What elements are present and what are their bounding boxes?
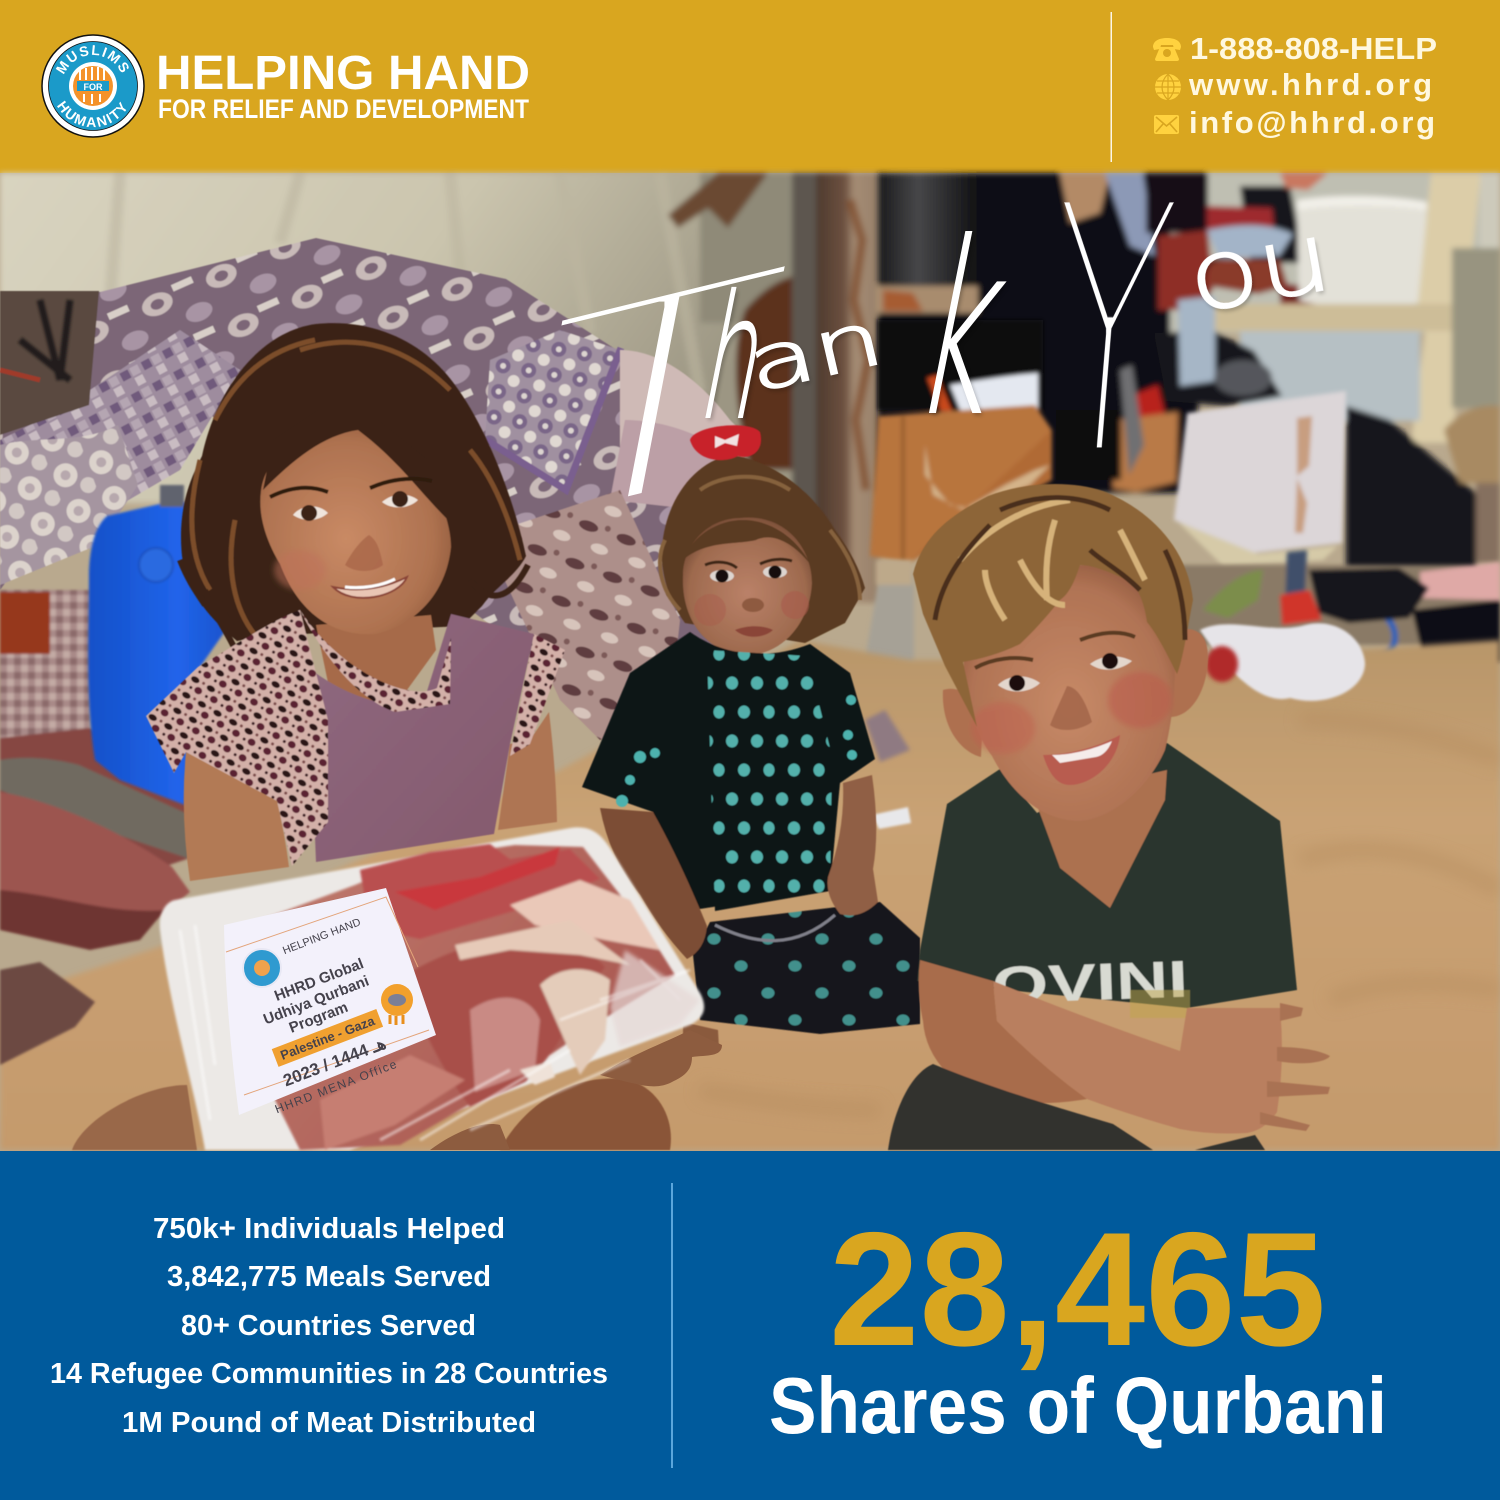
background: dark shelving and clothes [876,173,1500,593]
boy trousers [888,1064,1265,1150]
impact statistics list: 14 Refugee Communities in 28 Countries [50,1358,608,1390]
toddler legs [693,902,920,1034]
impact statistics list: 750k+ Individuals Helped [153,1213,505,1245]
contact details: www.hhrd.org [1188,67,1432,102]
cuts of meat [255,844,675,1150]
impact statistics list [50,1213,608,1439]
label on the package: Program [287,999,350,1037]
handwritten title: Thank You: k [898,192,1028,468]
blanket [0,238,760,777]
boy shirt print: OVINI [991,951,1189,1015]
logo: Muslims for Humanity seal: MUSLIMS [56,45,129,74]
label on the package: HHRD Global [272,955,366,1005]
icon: telephone [1153,38,1181,61]
contact details [1188,31,1437,140]
organisation name: HELPING HAND [156,47,530,100]
sheep sticker [381,984,413,1025]
logo: Muslims for Humanity seal: HUMANITY [57,100,126,128]
boy shirt print [991,951,1190,1018]
boy fingers [1260,1003,1330,1131]
impact statistics list: 3,842,775 Meals Served [167,1261,491,1293]
toddler suit top [582,632,875,910]
girl dress [308,614,534,862]
photo: three children holding a Qurbani meat package [0,132,1500,1151]
child: toddler [582,425,920,1048]
girl legs [500,1078,671,1150]
boy ears [943,629,1208,757]
plastic film highlights [180,925,690,1140]
handwritten title: Thank You: ou [1180,201,1339,334]
logo: Muslims for Humanity seal [41,34,145,138]
organisation name: FOR RELIEF AND DEVELOPMENT [158,94,529,124]
girl arms [184,752,289,881]
left pile of cloth [0,590,190,1065]
background: tent wall [0,173,880,603]
handwritten title: Thank You: h [688,260,783,458]
handwritten title: Thank You: an [739,294,891,410]
toddler scrunchie [690,425,761,460]
header divider [1110,12,1112,162]
girl face [260,422,451,634]
label on the package: 2023 / هـ 1444 [280,1034,389,1090]
header band [0,0,1500,173]
girl hair [181,323,526,641]
girl neck [316,615,436,712]
handwritten title: Thank You: T [498,204,808,596]
label on the package: HELPING HAND [281,916,362,957]
boy neck [1035,770,1167,908]
boy arms [919,960,1087,1103]
boy face [964,565,1175,821]
boy hair [913,484,1193,727]
meat package [160,827,722,1150]
white box [1174,391,1346,566]
contact details: info@hhrd.org [1189,105,1435,140]
boy shirt [917,743,1297,1008]
sand floor [0,623,1500,1150]
organisation name [156,47,530,124]
handwritten title: Thank You: h [688,260,783,458]
handwritten title: Thank You [498,132,1339,596]
child: girl [72,323,671,1150]
toddler face [683,518,812,655]
blue water jug [88,485,288,805]
handwritten title: Thank You: ou [1180,201,1339,334]
hands under tray [600,1030,722,1086]
bottom impact band [0,1151,1500,1500]
icon: globe [1155,74,1181,100]
cardboard box [870,320,1052,563]
logo: Muslims for Humanity seal: FOR [84,82,103,92]
icon: envelope [1154,115,1179,134]
foam tray [160,827,704,1150]
impact statistics list: 80+ Countries Served [181,1310,476,1342]
handwritten title: Thank You: Y [1028,132,1189,532]
label on the package [221,888,436,1116]
label on the package: Udhiya Qurbani [261,973,371,1028]
headline caption: Shares of Qurbani [769,1361,1387,1450]
contact details: 1-888-808-HELP [1190,31,1437,66]
band divider [671,1183,673,1468]
headline number: 28,465 [829,1199,1326,1380]
impact statistics list: 1M Pound of Meat Distributed [122,1407,536,1439]
label on the package: Palestine - Gaza [278,1013,377,1063]
floor clutter [864,550,1500,666]
toddler hair [662,455,865,643]
label on the package: HHRD MENA Office [273,1057,400,1116]
handwritten title: Thank You: an [739,294,891,410]
child: boy [888,484,1330,1150]
toddler arms [600,808,707,959]
handwritten title: Thank You: k [898,192,1028,468]
